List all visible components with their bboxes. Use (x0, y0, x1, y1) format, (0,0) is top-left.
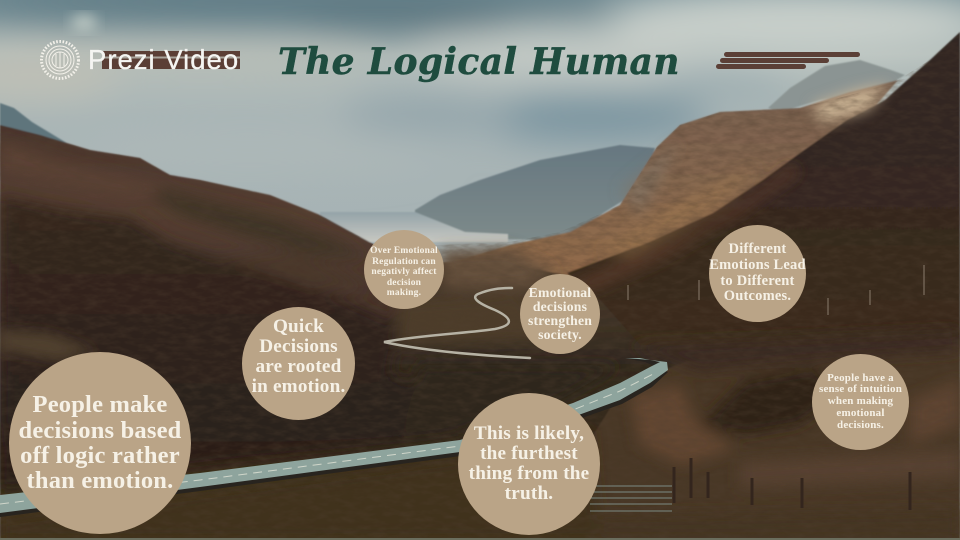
bubble: people make decisions (9, 352, 191, 534)
logo: Prezi Video watermark (40, 40, 240, 80)
bubble: people make decisions: off logic rather (20, 442, 180, 469)
decorative title bars (716, 52, 860, 69)
bubble: sense of intuition: emotional (836, 407, 885, 419)
bubble: people make decisions: People make (33, 391, 167, 418)
bubble: furthest from truth: This is likely, (474, 423, 584, 444)
bubble: quick decisions: Decisions (259, 336, 338, 356)
gate and fence posts (590, 265, 924, 511)
bubble: over emotional regulation: decision (387, 278, 421, 288)
bubble: furthest from truth (458, 393, 600, 535)
winding road (0, 288, 668, 517)
bubble: different emotions: to Different (720, 272, 795, 288)
bubble: furthest from truth: truth. (505, 483, 553, 504)
far mountains and loch (0, 103, 70, 145)
tan sunlit mountain (440, 80, 898, 280)
title: The Logical Human (278, 41, 680, 83)
bubble: different emotions: Different (729, 241, 786, 257)
bubble: different emotions: Outcomes. (724, 288, 791, 304)
lower right moorland (590, 340, 960, 540)
clouds (0, 0, 960, 172)
bubble: furthest from truth: thing from the (469, 463, 589, 484)
valley floor (0, 262, 960, 540)
bubble: quick decisions: Quick (273, 316, 324, 336)
bubble: sense of intuition (812, 354, 909, 450)
right hillside (567, 32, 960, 350)
bubble: emotional decisions: decisions (533, 299, 587, 314)
bubble: sense of intuition: People have a (827, 372, 894, 384)
left hillside (0, 125, 420, 480)
bubble: emotional decisions (520, 274, 600, 354)
bubble: sense of intuition: when making (828, 395, 893, 407)
bubble: different emotions: Emotions Lead (709, 257, 806, 273)
bubble: over emotional regulation: negativly affect (371, 267, 437, 277)
bubble: different emotions (709, 225, 806, 322)
bubble: sense of intuition: decisions. (837, 419, 884, 431)
logo icon: concentric ring (40, 40, 80, 80)
bubble: people make decisions: than emotion. (27, 467, 173, 494)
bubble: quick decisions: in emotion. (252, 376, 345, 396)
bubble: emotional decisions: Emotional (529, 285, 591, 300)
logo wordmark: Prezi Video (88, 44, 239, 75)
bubble: quick decisions (242, 307, 355, 420)
logo bar behind wordmark (102, 51, 240, 69)
bubble: furthest from truth: the furthest (480, 443, 578, 464)
bubble: over emotional regulation: making. (387, 288, 421, 298)
bubble: sense of intuition: sense of intuition (819, 383, 902, 395)
bubble: emotional decisions: society. (538, 327, 582, 342)
snowy peak (768, 60, 905, 112)
bubble: over emotional regulation: Regulation can (372, 257, 436, 267)
bubble: people make decisions: decisions based (19, 417, 181, 444)
bubble: quick decisions: are rooted (255, 356, 342, 376)
bubble: over emotional regulation (364, 230, 444, 309)
bubble: over emotional regulation: Over Emotional (370, 246, 438, 256)
bubble: emotional decisions: strengthen (528, 313, 592, 328)
